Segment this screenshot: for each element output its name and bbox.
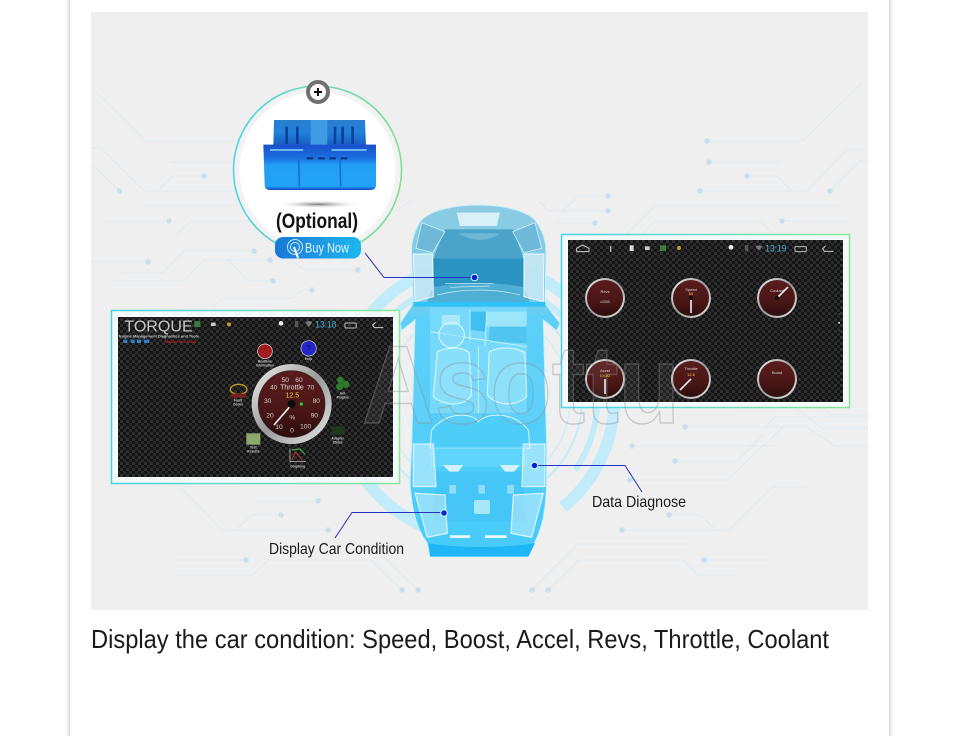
gauge: coolant <box>757 278 797 318</box>
gauge: boost: Boost <box>772 370 783 375</box>
gauge: speed: 50 <box>689 291 694 296</box>
gauge: throttle: 12.6 <box>687 372 696 377</box>
car body <box>400 205 560 557</box>
gauge: speed: Speed <box>685 287 697 292</box>
panel: grey background <box>91 12 868 610</box>
main gauge: 100 <box>300 423 311 430</box>
status bar: 13:19 <box>765 244 786 254</box>
optional label: (Optional) <box>276 210 358 233</box>
circuit nodes <box>117 138 833 593</box>
caption: Display the car condition: Speed, Boost, Accel, Revs, Throttle, Coolant <box>91 624 830 654</box>
gauge: speed <box>671 278 711 318</box>
menu icons <box>230 341 349 468</box>
car illustration <box>400 205 560 557</box>
seats <box>433 348 527 404</box>
plus badge <box>308 82 328 102</box>
rear bench <box>430 415 530 448</box>
gauge: boost <box>757 359 797 399</box>
main gauge: 90 <box>311 413 318 420</box>
menu icons: Fault <box>234 398 243 402</box>
main gauge: 12.5 <box>286 392 299 399</box>
circuit line background <box>91 83 868 590</box>
main gauge: Throttle <box>280 384 304 391</box>
main gauge: 40 <box>270 385 278 392</box>
main gauge: 0 <box>290 427 294 434</box>
main gauge <box>252 364 332 444</box>
interior <box>430 307 527 413</box>
watermark: Asottu <box>362 323 680 447</box>
menu icons: ? <box>306 344 311 353</box>
leader: data diagnose <box>531 462 642 492</box>
menu icons: Realtime <box>258 359 272 363</box>
gauge: throttle: Throttle <box>684 366 699 371</box>
gauge: accel: 10.083 <box>600 374 610 378</box>
circle <box>234 86 402 254</box>
main gauge: 70 <box>307 385 315 392</box>
menu icons: Information <box>256 363 274 367</box>
gauge: coolant: Coolant <box>770 288 785 293</box>
rings behind car <box>340 263 614 532</box>
main gauge: 60 <box>295 377 303 384</box>
status bar <box>194 321 200 327</box>
menu icons: Adapter <box>331 436 345 440</box>
menu icons: Codes <box>233 402 243 406</box>
panel: torque screen <box>112 310 400 484</box>
label: display car condition: Display Car Condition <box>269 541 404 558</box>
menu icons: Graphing <box>290 464 305 468</box>
rear section <box>430 448 527 467</box>
panel: torque screen: 13:18 <box>315 320 336 330</box>
hood panel <box>433 229 523 258</box>
buy now button: Buy Now <box>305 240 349 256</box>
gauge: accel <box>585 359 625 399</box>
torque logo: TORQUE <box>124 319 193 336</box>
leader: module <box>365 253 478 281</box>
main gauge: 10 <box>275 424 283 431</box>
buy now button <box>275 237 361 258</box>
gauge: revs: x1000 <box>600 300 610 304</box>
menu icons: Get <box>340 391 346 395</box>
label: data diagnose: Data Diagnose <box>592 494 686 511</box>
status bar <box>577 244 840 331</box>
windshield <box>433 258 524 287</box>
leader: display car condition <box>335 510 447 538</box>
icon: OBD adapter <box>263 120 376 208</box>
menu icons: Status <box>333 440 343 444</box>
main gauge: % <box>289 414 295 421</box>
cowl band <box>413 302 545 307</box>
gauge: accel: Accel <box>600 368 610 373</box>
menu icons: Test <box>250 445 258 449</box>
main gauge: 20 <box>266 413 274 420</box>
menu icons: Plugins <box>337 395 349 399</box>
panel: torque screen: Engine Management Diagnostics and Tools <box>119 334 199 338</box>
gauge: throttle <box>671 359 711 399</box>
optional OBD module callout <box>234 82 402 258</box>
main gauge: 80 <box>313 398 320 405</box>
panel: torque screen: Realtime Web Setup <box>164 340 197 344</box>
menu icons: Results <box>247 449 259 453</box>
gauge: revs <box>585 278 625 318</box>
gauge: revs: Revs <box>600 289 610 294</box>
main gauge: 50 <box>282 377 289 384</box>
headlights <box>413 254 433 302</box>
panel: six gauge screen <box>562 234 850 408</box>
main gauge: 30 <box>264 398 272 405</box>
menu icons: Help <box>305 357 312 361</box>
